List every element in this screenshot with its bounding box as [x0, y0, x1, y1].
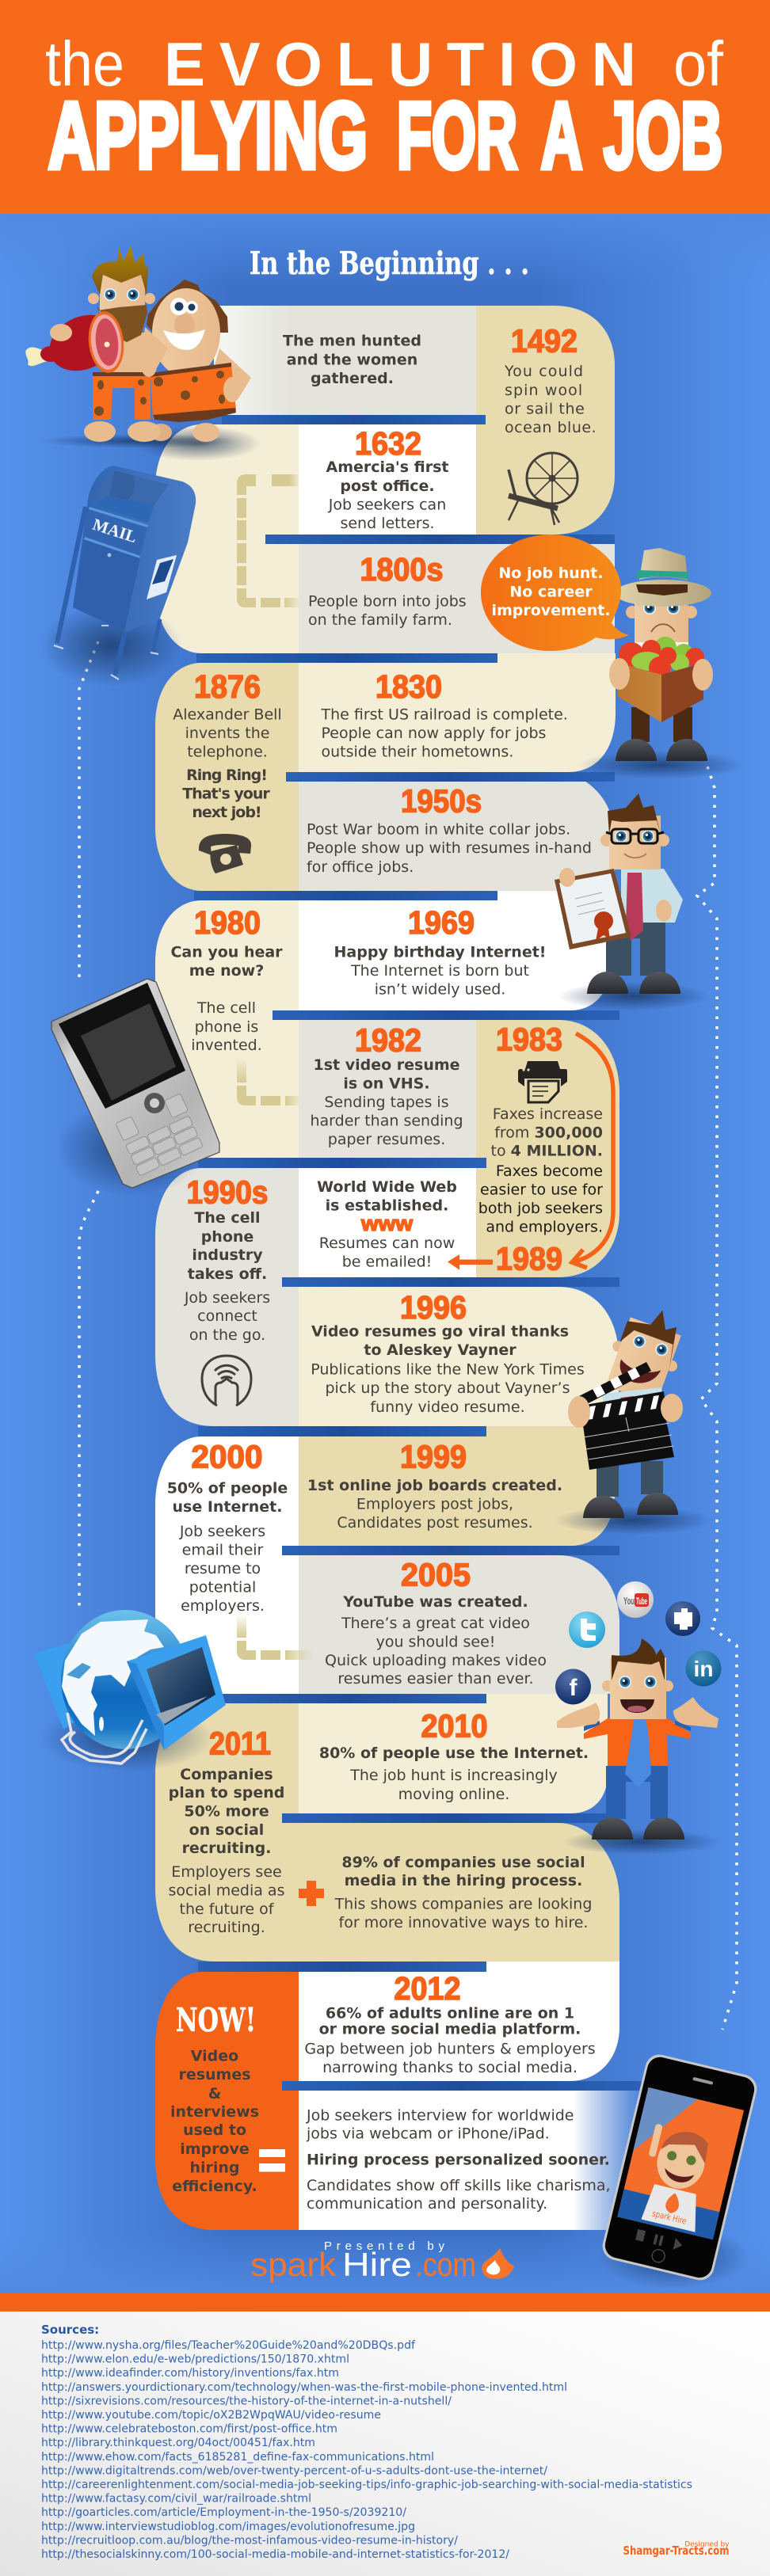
- source links: http://library.thinkquest.org/04oct/00451/fax.htm: [41, 2437, 315, 2449]
- panel: 1999: [299, 1426, 615, 1546]
- source links: http://www.factasy.com/civil_war/railroade.shtml: [41, 2493, 311, 2506]
- worker shirt: [621, 869, 683, 923]
- panel: 2005: [237, 1555, 619, 1694]
- source links: http://www.ehow.com/facts_6185281_define-fax-communications.html: [41, 2451, 434, 2464]
- panel: 1876: 1876: [194, 668, 261, 705]
- icon: linkedin: [686, 1650, 721, 1687]
- panel: 2010: The job hunt is increasingly: [349, 1767, 558, 1784]
- designer credit: Designed by: [684, 2540, 730, 2548]
- clipboard: [555, 868, 631, 949]
- source links: http://www.celebrateboston.com/first/post-office.htm: [41, 2423, 337, 2436]
- panel: 1950s: 1950s: [401, 782, 482, 819]
- illustration: globe and monitors: [34, 1610, 226, 1771]
- icon: myspace: [665, 1601, 700, 1636]
- source links: http://answers.yourdictionary.com/technology/when-was-the-first-mobile-phone-invented.html: [41, 2381, 567, 2394]
- icon: facebook: f: [569, 1675, 578, 1701]
- title line: the evolution of: [45, 29, 724, 99]
- panel: 2005: 2005: [401, 1557, 471, 1593]
- farmer legs: [631, 707, 692, 742]
- icon: youtube: Tube: [636, 1596, 647, 1607]
- panel: 1980: me now?: [189, 962, 264, 980]
- panel: 1492: ocean blue.: [505, 419, 597, 436]
- panel: 1969: Happy birthday Internet!: [334, 944, 546, 961]
- title line: applying for a job: FOR: [397, 83, 517, 188]
- panel: 1492: or sail the: [505, 401, 585, 418]
- panel: 2012: narrowing thanks to social media.: [322, 2059, 578, 2076]
- section heading: in the beginning: In the Beginning . . .: [250, 245, 529, 282]
- panel: 1980: The cell: [196, 999, 256, 1017]
- illustration: cell phone: [51, 979, 219, 1196]
- panel: 1830: 1830: [375, 668, 442, 705]
- icon: facebook: [555, 1669, 591, 1704]
- panel: 1983: [476, 1020, 619, 1277]
- sources heading: Sources:: [41, 2323, 99, 2337]
- presented by logo: Presented by: [324, 2239, 445, 2253]
- icon: wifi signal: [202, 1356, 251, 1406]
- panel: 1983: from 300,000: [494, 1124, 603, 1142]
- title line: applying for a job: A: [541, 83, 582, 188]
- panel: 2011: plan to spend: [169, 1784, 284, 1802]
- panel: 1800s: People born into jobs: [308, 592, 467, 610]
- panel: 89 percent: This shows companies are looking: [334, 1896, 592, 1913]
- panel: 1800s: on the family farm.: [308, 611, 452, 629]
- source links: http://sixrevisions.com/resources/the-history-of-the-internet-in-a-nutshell/: [41, 2395, 452, 2407]
- panel: www: is established.: [326, 1197, 448, 1215]
- illustration: mailbox: MAIL: [90, 515, 139, 546]
- panel: 1983: Faxes become: [496, 1162, 603, 1180]
- source links: http://www.nysha.org/files/Teacher%20Guide%20and%20DBQs.pdf: [41, 2339, 416, 2352]
- panel: 1632: [299, 424, 476, 535]
- panel: 1983: both job seekers: [478, 1200, 603, 1217]
- title line: applying for a job: APPLYING: [48, 83, 368, 188]
- panel: 1983: to 4 MILLION.: [491, 1142, 603, 1159]
- source links: http://www.digitaltrends.com/web/over-twenty-percent-of-u-s-adults-dont-use-the-internet/: [41, 2464, 547, 2477]
- panel: now: resumes: [178, 2066, 251, 2083]
- title line: the evolution of: of: [673, 29, 724, 99]
- speech bubble: [481, 535, 629, 651]
- icon: flame: [482, 2248, 514, 2279]
- clapper man head: [599, 1299, 694, 1406]
- source links: http://thesocialskinny.com/100-social-media-mobile-and-internet-statistics-for-2012/: [41, 2548, 509, 2561]
- panel: 1990s: industry: [192, 1246, 263, 1264]
- farmer hat: [615, 548, 711, 607]
- panel: 1800s: [299, 535, 615, 653]
- panel: 1982: is on VHS.: [343, 1075, 430, 1093]
- icon: equals: [259, 2149, 285, 2171]
- arrow: 1983 to 1989: [572, 1033, 613, 1268]
- panel: now: improve: [180, 2140, 250, 2158]
- panel: 1982: 1982: [355, 1022, 421, 1058]
- panel: 1982: paper resumes.: [328, 1131, 445, 1148]
- panel: 1876: next job!: [192, 804, 261, 821]
- panel: 1492: spin wool: [505, 382, 583, 399]
- clapperboard: [581, 1391, 674, 1470]
- illustration: farmer with speech bubble: [481, 535, 745, 779]
- caveman: [25, 245, 168, 442]
- presented by logo: [250, 2239, 514, 2283]
- panel: 2011: 2011: [209, 1725, 271, 1761]
- panel: 1996: to Aleskey Vayner: [364, 1341, 517, 1359]
- panel: 89 percent: 89% of companies use social: [341, 1854, 585, 1871]
- panel: www: www: [360, 1212, 414, 1235]
- illustration: office worker with clipboard: [555, 793, 709, 1010]
- panel: 1950s: [299, 772, 615, 891]
- hands: [557, 1703, 600, 1728]
- designer credit: [623, 2540, 730, 2558]
- logo wordmark: [250, 2246, 476, 2283]
- panel: now: [155, 1972, 299, 2230]
- panel: 1969: isn’t widely used.: [375, 980, 505, 998]
- panel: 1982: harder than sending: [310, 1112, 463, 1129]
- panel: job seekers interview: Job seekers interview for worldwide: [306, 2106, 574, 2124]
- mailbox dome and side: [73, 466, 196, 632]
- cables: [62, 1713, 147, 1764]
- hands: [609, 658, 630, 690]
- panel: 1982: 1st video resume: [313, 1056, 460, 1074]
- panel: 2011: the future of: [180, 1901, 275, 1918]
- panel: 2005: Quick uploading makes video: [325, 1652, 547, 1669]
- panel: 2010: moving online.: [398, 1786, 509, 1803]
- panel: 1983: easier to use for: [480, 1181, 603, 1199]
- source links: http://www.youtube.com/topic/oX2B2WpqWAU/video-resume: [41, 2409, 381, 2422]
- panel: 1876: invents the: [185, 725, 269, 742]
- panel: now: NOW!: [176, 2001, 256, 2039]
- panel: 1492: 1492: [511, 323, 578, 360]
- panel: 2000: Job seekers: [179, 1523, 265, 1540]
- panel: 2000: potential: [189, 1579, 256, 1596]
- panel: 2011: on social: [189, 1821, 264, 1839]
- panel: now: efficiency.: [172, 2178, 257, 2195]
- panel: 1996: Video resumes go viral thanks: [311, 1322, 569, 1340]
- panel: 1996: pick up the story about Vayner’s: [325, 1379, 570, 1397]
- panel: www: Resumes can now: [319, 1235, 455, 1252]
- panel: 2010: 2010: [421, 1707, 488, 1744]
- icon: spinning wheel: [509, 453, 578, 525]
- panel: 1632: post office.: [340, 478, 435, 495]
- dashed connector: [237, 1614, 314, 1660]
- panel: 1999: Candidates post resumes.: [337, 1514, 533, 1532]
- panel: 2012: Gap between job hunters & employers: [304, 2040, 596, 2057]
- panel: men hunted: and the women: [287, 352, 417, 369]
- produce: [619, 637, 704, 679]
- icon: telephone: [199, 834, 251, 873]
- panel: 2011: 50% more: [184, 1802, 269, 1820]
- box: [618, 663, 661, 722]
- panel: 1996: funny video resume.: [370, 1398, 525, 1416]
- illustration: mailbox: [40, 466, 196, 687]
- panel: www: be emailed!: [342, 1253, 432, 1270]
- source links: http://recruitloop.com.au/blog/the-most-infamous-video-resume-in-history/: [41, 2534, 458, 2547]
- panel: 1876: That's your: [182, 786, 270, 803]
- dashed connector: [237, 474, 302, 607]
- icon: twitter: [569, 1611, 605, 1648]
- icon: plus: [299, 1881, 324, 1906]
- panel: 2010: 80% of people use the Internet.: [319, 1745, 589, 1762]
- panel: 1632: 1632: [355, 425, 421, 462]
- panel: 1990s: [155, 1168, 299, 1426]
- panel: men hunted: The men hunted: [283, 333, 421, 350]
- panel: 1492: [476, 306, 615, 535]
- panel: 1990s: phone: [201, 1228, 253, 1246]
- panel: 1876: telephone.: [187, 743, 268, 760]
- panel: 1969: 1969: [408, 904, 475, 941]
- source links: http://goarticles.com/article/Employment-in-the-1950-s/2039210/: [41, 2506, 406, 2519]
- panel: 2000: [155, 1436, 299, 1694]
- panel: 1982: [299, 1020, 476, 1158]
- header banner: [0, 0, 770, 214]
- illustration: cave couple: [25, 245, 261, 461]
- panel: 2000: 2000: [192, 1438, 263, 1474]
- arrow: 1989 to www: [448, 1254, 493, 1270]
- panel: 1876: [155, 663, 299, 891]
- phone body: [51, 979, 219, 1188]
- panel: 2011: Employers see: [171, 1863, 282, 1881]
- mailbox legs: [54, 507, 160, 679]
- panel: 1980: [155, 900, 303, 1158]
- globe: [61, 1610, 189, 1749]
- panel: 2011: [155, 1703, 299, 1961]
- icon: ham: [25, 304, 127, 382]
- designer credit: Shamgar-Tracts.com: [623, 2544, 729, 2558]
- panel: now: hiring: [189, 2159, 240, 2176]
- logo wordmark: spark: [250, 2246, 337, 2283]
- illustration: smartphone with video interview: [598, 2052, 760, 2289]
- back monitor: [34, 1643, 79, 1729]
- panel: 1632: Amercia's first: [326, 459, 448, 476]
- source links: http://www.interviewstudioblog.com/images/evolutionofresume.jpg: [41, 2521, 415, 2533]
- panel: men hunted: [214, 306, 476, 415]
- panel: 1950s: People show up with resumes in-hand: [307, 839, 592, 857]
- dotted path lines: [79, 641, 737, 2030]
- dashed connector: [237, 1058, 303, 1105]
- panel: 2005: resumes easier than ever.: [337, 1670, 534, 1688]
- panel: 2012: 2012: [395, 1970, 461, 2007]
- front monitor: [127, 1635, 226, 1750]
- panel: 89 percent: media in the hiring process.: [345, 1872, 582, 1889]
- panel: 1983: 1989: [496, 1240, 562, 1277]
- panel: 1632: Job seekers can: [328, 496, 446, 513]
- worker head: [600, 793, 669, 869]
- source links: http://careerenlightenment.com/social-media-job-seeking-tips/info-graphic-job-searching-with-social-media-statistics: [41, 2479, 692, 2491]
- panel: 1830: People can now apply for jobs: [322, 725, 546, 742]
- icon: youtube: [617, 1581, 654, 1618]
- panel: 1830: outside their hometowns.: [322, 743, 513, 760]
- panel: 2005: YouTube was created.: [342, 1593, 528, 1611]
- panel: www: [299, 1168, 493, 1277]
- panel: 1990s: connect: [197, 1307, 257, 1325]
- panel: 1830: [299, 653, 616, 772]
- panel: 1990s: takes off.: [188, 1265, 267, 1283]
- timeline divider bars: [194, 415, 642, 2091]
- panel: 1990s: 1990s: [187, 1174, 268, 1210]
- social man legs: [606, 1766, 668, 1819]
- panel: 1950s: Post War boom in white collar jobs.: [307, 820, 570, 838]
- title line: the evolution of: the: [45, 29, 124, 99]
- source links: http://www.ideafinder.com/history/inventions/fax.htm: [41, 2367, 339, 2380]
- social man head: [602, 1638, 673, 1719]
- mailbox door: [73, 540, 140, 631]
- panel: 1983: and employers.: [486, 1218, 603, 1235]
- panel: 2010: [299, 1694, 608, 1813]
- panel: job seekers interview: [299, 2091, 642, 2230]
- panel: 2011: Companies: [180, 1766, 273, 1783]
- panel: 2000: email their: [182, 1541, 264, 1558]
- panel: job seekers interview: jobs via webcam or iPhone/iPad.: [306, 2125, 550, 2143]
- panel: 2012: [299, 1961, 619, 2081]
- panel: 2005: There’s a great cat video: [341, 1615, 530, 1632]
- social media icons: [555, 1581, 721, 1704]
- panel: job seekers interview: communication and personality.: [307, 2195, 547, 2213]
- panel: now: &: [208, 2085, 221, 2102]
- panel: 1999: Employers post jobs,: [356, 1495, 513, 1512]
- panel: 1990s: on the go.: [189, 1326, 265, 1344]
- panel: 2005: you should see!: [376, 1633, 495, 1650]
- panel: 1800s: 1800s: [360, 551, 444, 588]
- panel: job seekers interview: Candidates show off skills like charisma,: [307, 2177, 611, 2194]
- panel: 89 percent: [299, 1823, 619, 1961]
- panel: 2000: 50% of people: [167, 1479, 288, 1497]
- panel: 1980: phone is: [195, 1018, 258, 1036]
- panel: 2000: employers.: [181, 1597, 265, 1615]
- panel: 2012: or more social media platform.: [319, 2021, 581, 2038]
- panel: 2012: 66% of adults online are on 1: [326, 2005, 574, 2022]
- panel: 1983: 1983: [496, 1022, 562, 1058]
- panel: 1969: The Internet is born but: [350, 962, 529, 980]
- smartphone body: [600, 2052, 760, 2283]
- panel: 1996: 1996: [400, 1289, 467, 1326]
- panel: men hunted: gathered.: [311, 370, 394, 387]
- panel: 1830: The first US railroad is complete.: [320, 706, 568, 724]
- panel: 2000: use Internet.: [173, 1498, 282, 1516]
- icon: youtube: You: [623, 1595, 635, 1607]
- panel: 89 percent: for more innovative ways to hire.: [339, 1914, 588, 1931]
- phone keypad: [116, 1093, 204, 1176]
- orange footer band: [0, 2293, 770, 2312]
- panel: 1996: [299, 1287, 619, 1426]
- source links: http://www.elon.edu/e-web/predictions/150/1870.xhtml: [41, 2353, 349, 2366]
- panel: now: interviews: [170, 2103, 259, 2121]
- farmer head: [626, 584, 697, 649]
- sources section: [0, 2312, 770, 2576]
- panel: 1969: [299, 891, 615, 1010]
- panel: job seekers interview: Hiring process personalized sooner.: [307, 2151, 610, 2168]
- panel: 2011: social media as: [169, 1882, 284, 1899]
- cavewoman: [147, 280, 251, 442]
- panel: 1996: Publications like the New York Times: [311, 1360, 585, 1378]
- speech bubble: No job hunt.: [498, 565, 604, 582]
- panel: 1983: Faxes increase: [493, 1105, 603, 1123]
- panel: 1492: You could: [504, 363, 584, 380]
- clapper stick: [579, 1362, 651, 1406]
- panel: 1876: Alexander Bell: [173, 706, 282, 724]
- illustration: social media man: [557, 1638, 721, 1855]
- logo wordmark: Hire: [342, 2246, 412, 2283]
- panel: 1876: Ring Ring!: [186, 767, 267, 784]
- speech bubble: improvement.: [491, 602, 611, 619]
- speech bubble: No career: [509, 583, 593, 600]
- tie: [625, 1719, 651, 1787]
- panel: 1980: Can you hear: [170, 944, 283, 961]
- source links: [41, 2339, 692, 2561]
- smartphone screen: spark Hire: [651, 2209, 688, 2227]
- panel: now: Video: [191, 2048, 238, 2065]
- clapper man legs: [597, 1461, 663, 1497]
- panel: 1999: 1999: [400, 1438, 467, 1474]
- panel: 1982: Sending tapes is: [324, 1094, 449, 1111]
- panel: 2011: recruiting.: [188, 1919, 265, 1936]
- collar: [602, 1387, 664, 1417]
- panel: 2011: recruiting.: [182, 1840, 271, 1857]
- panel: cream farm column with connector: [155, 424, 302, 653]
- phone face: [59, 983, 185, 1109]
- title line: the evolution of: EVOLUTION: [164, 29, 636, 99]
- panel: 1632: send letters.: [340, 515, 435, 532]
- panel: now: used to: [183, 2121, 246, 2139]
- worker legs: [606, 919, 665, 976]
- phone screen: [81, 1003, 176, 1101]
- panel: 1950s: for office jobs.: [307, 858, 414, 876]
- smartphone screen: [617, 2087, 744, 2239]
- mailbox logo: [147, 555, 177, 599]
- mailbox flap: [85, 507, 148, 556]
- panel: 1980: 1980: [194, 904, 261, 941]
- panel: www: World Wide Web: [317, 1178, 457, 1196]
- panel: 1999: 1st online job boards created.: [307, 1477, 562, 1494]
- panel: 2000: resume to: [185, 1560, 261, 1577]
- illustration: clapperboard man: [555, 1299, 713, 1535]
- mailbox opening: [93, 470, 169, 523]
- panel: 1980: invented.: [191, 1037, 262, 1054]
- social man shirt: [584, 1717, 691, 1766]
- panel: 1990s: The cell: [194, 1209, 261, 1227]
- logo wordmark: .com: [415, 2246, 476, 2283]
- icon: fax machine: [518, 1061, 567, 1102]
- smartphone controls: [635, 2229, 684, 2251]
- icon: linkedin: in: [694, 1657, 713, 1681]
- panel: 1990s: Job seekers: [184, 1289, 270, 1307]
